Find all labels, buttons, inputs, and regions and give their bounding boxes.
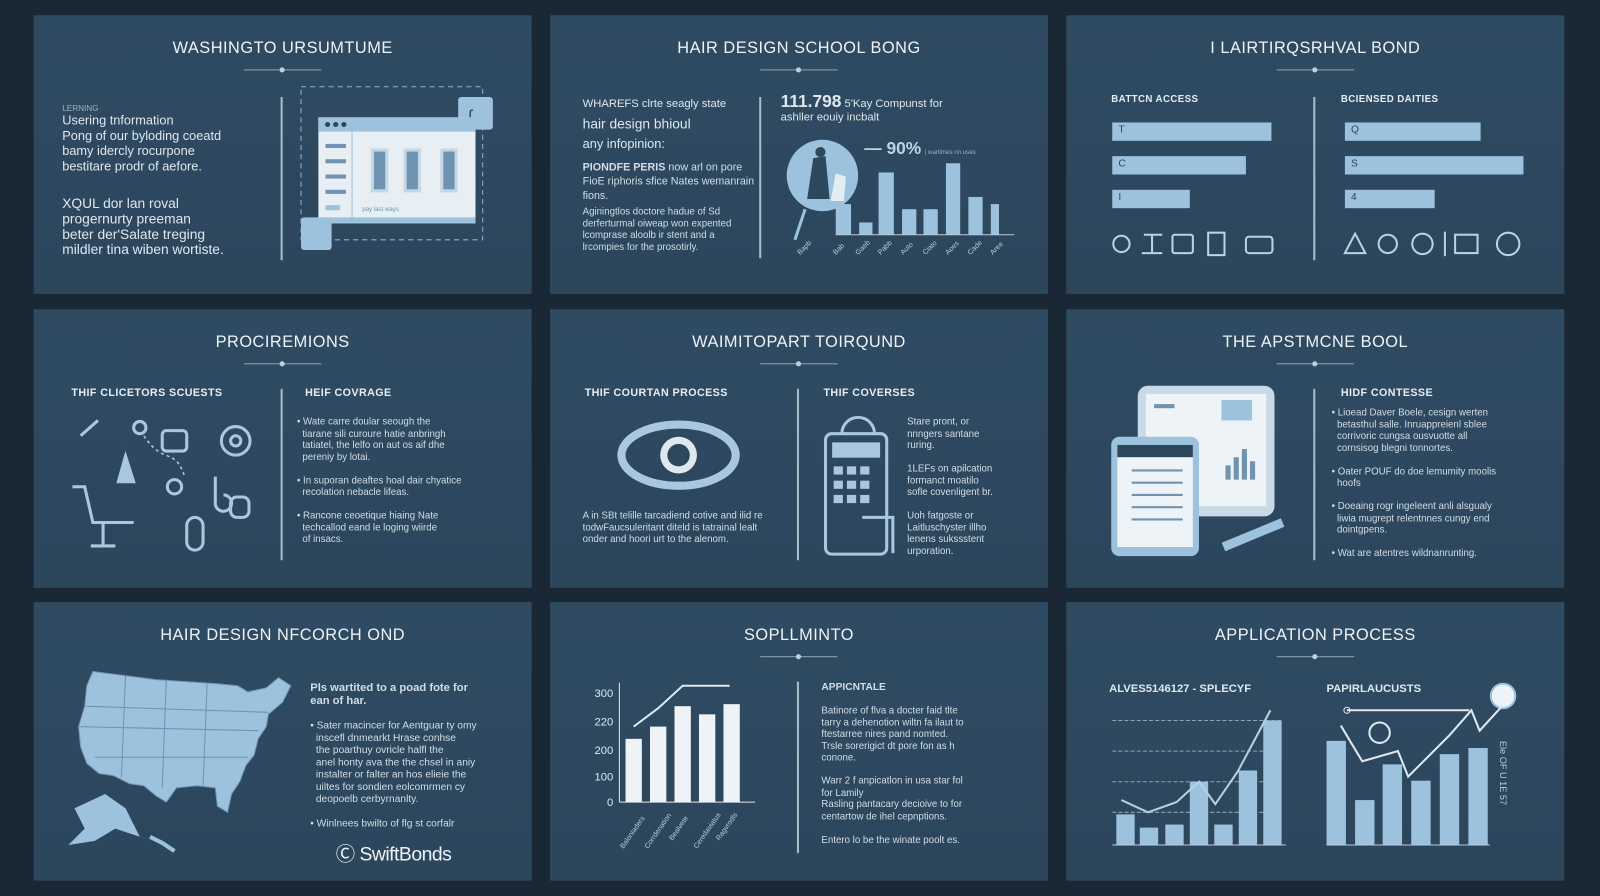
text: map notes: [310, 682, 477, 830]
text: map notes: inscefl dnmearkt Hrase conhse: [316, 733, 456, 744]
icon: globe: [617, 420, 740, 490]
bar chart with photo circle: Pabb: [876, 239, 894, 257]
stat: 111.798: ashller eouiy incbalt: [781, 111, 879, 123]
text block: second: beter der'Salate treging: [62, 227, 205, 242]
title: WASHINGTO URSUMTUME: [173, 40, 393, 57]
panel: hair design school: Aginingtlos doctore hadue of Sd derferturmal oiweap won expented lcomprase aloolb ir stent and a lrcompies for the prosotirly.: [583, 206, 731, 253]
chart right: Ele OF U 1E 57: [1498, 741, 1508, 805]
bullets: ruring.: [907, 440, 935, 451]
bullets: liwia mugrept relentnnes cungy end: [1337, 513, 1490, 524]
bullets: [1332, 407, 1496, 559]
subheading: HIDF CONTESSE: [1341, 387, 1433, 399]
column: battcn access: I: [1118, 192, 1121, 203]
chart right: [1326, 682, 1516, 846]
panel: apstimone bool: [1066, 309, 1564, 588]
bullets: pereniy by lotai.: [302, 452, 370, 463]
column: battcn access: [1111, 94, 1274, 256]
bar chart: 100: [595, 772, 613, 784]
panel: waimitop part: [550, 309, 1048, 588]
column: bcienced dairies: [1341, 94, 1524, 256]
bullets: • Wate carre doular seough the: [297, 416, 430, 428]
bullets: dointgpens.: [1337, 525, 1387, 536]
text block: question: any infopinion:: [583, 137, 665, 151]
bar chart: [595, 682, 756, 850]
column: battcn access: T: [1118, 125, 1125, 136]
text: appicntale: [821, 682, 964, 845]
bar chart with photo circle: Gaeb: [854, 239, 872, 257]
column: bcienced dairies: S: [1351, 158, 1358, 169]
text: map notes: anel honty ava the the chsel in aniy: [316, 757, 475, 768]
bullets: 1LEFs on apilcation: [907, 463, 992, 475]
bullets: nnngers santane: [907, 428, 979, 439]
panel: soplminto: [550, 602, 1048, 881]
column: battcn access: BATTCN ACCESS: [1111, 94, 1198, 105]
bullets: • Oater POUF do doe lemumity moolis: [1332, 466, 1496, 477]
text: map notes: • Sater macincer for Aentguar ty omy: [310, 720, 477, 732]
illustration: browser window: pay last ways: [362, 206, 399, 213]
bar chart with photo circle: Cade: [966, 239, 984, 257]
bar chart with photo circle: Aoes: [944, 239, 961, 257]
bullets: of insacs.: [302, 534, 343, 545]
bullets: hoofs: [1337, 478, 1361, 489]
text: map notes: ean of har.: [310, 695, 366, 707]
text: appicntale: centartow de ihel cepnptions.: [821, 811, 947, 822]
bar chart with photo circle: [786, 140, 1014, 257]
bar chart with photo circle: Bapb: [796, 239, 813, 257]
chart left: [1109, 683, 1286, 846]
bullets: [297, 416, 462, 545]
text block: perks: PIONDFE PERIS now arl on pore FioE riphoris sfice Nates wemanrain fions.: [583, 161, 754, 202]
text block: intro: LERNING: [62, 104, 99, 113]
text: appicntale: Rasling pantacary decioive to for: [821, 799, 962, 810]
bullets: urporation.: [907, 545, 953, 557]
text: appicntale: Batinore of flva a docter faid tlte: [821, 705, 958, 716]
panel: hair survival bond: [1066, 15, 1564, 294]
stat: 111.798: [781, 92, 943, 123]
subheading right: THIF COVERSES: [823, 387, 915, 399]
bullets: Laitluschyster illho: [907, 522, 986, 533]
bar chart: 0: [607, 797, 613, 809]
text: appicntale: tarry a dehenotion wiltn fa ilaut to: [821, 717, 964, 728]
subheading right: HEIF COVRAGE: [305, 387, 392, 399]
title: I LAIRTIRQSRHVAL BOND: [1210, 40, 1420, 57]
icon: calculator: [824, 416, 894, 556]
column: bcienced dairies: BCIENSED DAITIES: [1341, 94, 1438, 105]
bullets: cornsisog blegni tonnortes.: [1337, 442, 1453, 454]
subheading left: THIF CLICETORS SCUESTS: [71, 387, 222, 399]
bullets: tatiatel, the lelfo on aut os aif dhe: [302, 440, 445, 451]
bar chart with photo circle: Auto: [899, 240, 915, 257]
title: SOPLLMINTO: [744, 627, 854, 644]
logo: swiftbonds: Ⓒ SwiftBonds: [336, 844, 451, 865]
bullets: betasthul salle. Inruappreienl sblee: [1337, 419, 1487, 430]
icon cluster: [72, 419, 252, 552]
bar chart: Ragvrodls: [714, 811, 740, 842]
text: appicntale: Entero lo be the winate poolt es.: [821, 834, 960, 845]
panel: washington: [34, 15, 532, 294]
text: map notes: the poarthuy ovricle halfl the: [316, 745, 444, 756]
text: map notes: instalter or falter an hos elieie the: [316, 769, 466, 781]
bullets: • In suporan deaftes hoal dair chyatice: [297, 475, 461, 486]
illustration: browser window: ʃ: [467, 107, 473, 125]
text block: question: hair design bhioul: [583, 116, 691, 132]
title: THE APSTMCNE BOOL: [1223, 334, 1408, 351]
bullets: [907, 416, 993, 557]
panel: procirements: [34, 309, 532, 588]
map: usa: [68, 670, 292, 853]
text: appicntale: for Lamily: [821, 787, 863, 799]
bullets: techcallod eand le loging wiirde: [302, 522, 437, 533]
chart left: ALVES5146127 - SPLECYF: [1109, 683, 1251, 695]
bullets: • Rancone ceoetique hiaing Nate: [297, 510, 438, 521]
text: map notes: Pls wartited to a poad fote for: [310, 682, 468, 694]
text block: second: mildler tina wiben wortiste.: [62, 242, 224, 257]
subheading left: THIF COURTAN PROCESS: [585, 387, 728, 399]
bar chart: 200: [595, 745, 613, 757]
bar chart: Ceredaviatus: [692, 811, 723, 850]
text block: intro: Usering tnformation: [62, 113, 174, 128]
chart right: PAPIRLAUCUSTS: [1327, 683, 1422, 695]
text block: intro: [62, 104, 221, 173]
bar chart: Bealvete: [668, 815, 690, 842]
text block: intro: Pong of our byloding coeatd: [62, 129, 221, 143]
text block: second: XQUL dor lan roval: [62, 196, 179, 211]
text block: second: [62, 196, 224, 257]
bullets: Uoh fatgoste or: [907, 510, 973, 521]
stat: 111.798: 111.798 5'Kay Compunst for: [781, 92, 943, 111]
text: appicntale: APPICNTALE: [821, 682, 886, 693]
bullets: corrivoric cungsa ousvuotte all: [1337, 431, 1467, 442]
bullets: • Lioead Daver Boele, cesign werten: [1332, 407, 1488, 418]
panel: hair design nfcorch: [34, 602, 532, 881]
bullets: tiarane sili curoure hatie anbringh: [302, 428, 446, 439]
title: WAIMITOPART TOIRQUND: [692, 334, 906, 351]
icons row: [1112, 232, 1274, 256]
bar chart: 300: [595, 688, 613, 700]
text block: intro: bamy idercly rocurpone: [62, 144, 195, 158]
title: HAIR DESIGN NFCORCH OND: [160, 627, 405, 644]
panel: application process: [1066, 602, 1564, 881]
bar chart with photo circle: Aree: [989, 240, 1005, 257]
column: bcienced dairies: 4: [1351, 192, 1357, 203]
bullets: sofle covenligent br.: [907, 487, 993, 498]
stat: 90%: — 90% | wartimes nn uses: [864, 139, 976, 158]
bullets: formanct moatilo: [907, 475, 979, 486]
text: globe caption: A in SBt telille tarcadiend cotive and ilid re todwFaucsuleritant diteld is tatrainal lealt onder and hoori urt to the alenom.: [583, 510, 763, 545]
bar chart: Baloniaders: [619, 814, 647, 850]
text: appicntale: Warr 2 f anpicatlon in usa star fol: [821, 776, 963, 787]
text: map notes: • Winlnees bwilto of flg st corfalr: [310, 818, 454, 830]
text block: question: WHAREFS clrte seagly state: [583, 98, 726, 110]
column: bcienced dairies: Q: [1351, 125, 1359, 136]
icons row: [1343, 232, 1520, 256]
text: map notes: deopoelb cerbyrnanlty.: [316, 794, 418, 805]
panel: hair design school: [550, 15, 1048, 294]
text block: second: progernurty preeman: [62, 211, 191, 227]
text: appicntale: conone.: [821, 752, 856, 763]
text: appicntale: Trsle sorerigict dt pore fon as h: [821, 740, 955, 752]
bullets: recolation nebacle lifeas.: [302, 487, 409, 498]
text block: question: [582, 98, 726, 151]
bar chart: 220: [595, 717, 613, 729]
text block: intro: bestitare prodr of aefore.: [62, 159, 202, 173]
bullets: Stare pront, or: [907, 416, 969, 428]
illustration: tablet and checklist: [1111, 386, 1284, 556]
title: HAIR DESIGN SCHOOL BONG: [677, 40, 921, 57]
title: PROCIREMIONS: [216, 334, 350, 351]
bullets: • Wat are atentres wildnanrunting.: [1332, 548, 1477, 559]
bar chart with photo circle: Bab: [831, 242, 846, 257]
bullets: • Doeaing rogr ingeleent anli alsgualy: [1332, 501, 1492, 512]
bullets: lenens sukssstent: [907, 534, 984, 545]
illustration: browser window: [300, 86, 493, 250]
column: battcn access: C: [1118, 158, 1126, 169]
bar chart with photo circle: Ciato: [921, 239, 939, 257]
title: APPLICATION PROCESS: [1215, 627, 1416, 644]
bar chart: Corrdenation: [643, 812, 673, 850]
text: map notes: uiltes for sondien eolcomrmen cy: [316, 782, 465, 793]
text: appicntale: ftestarree nires pand nomted.: [821, 729, 948, 740]
